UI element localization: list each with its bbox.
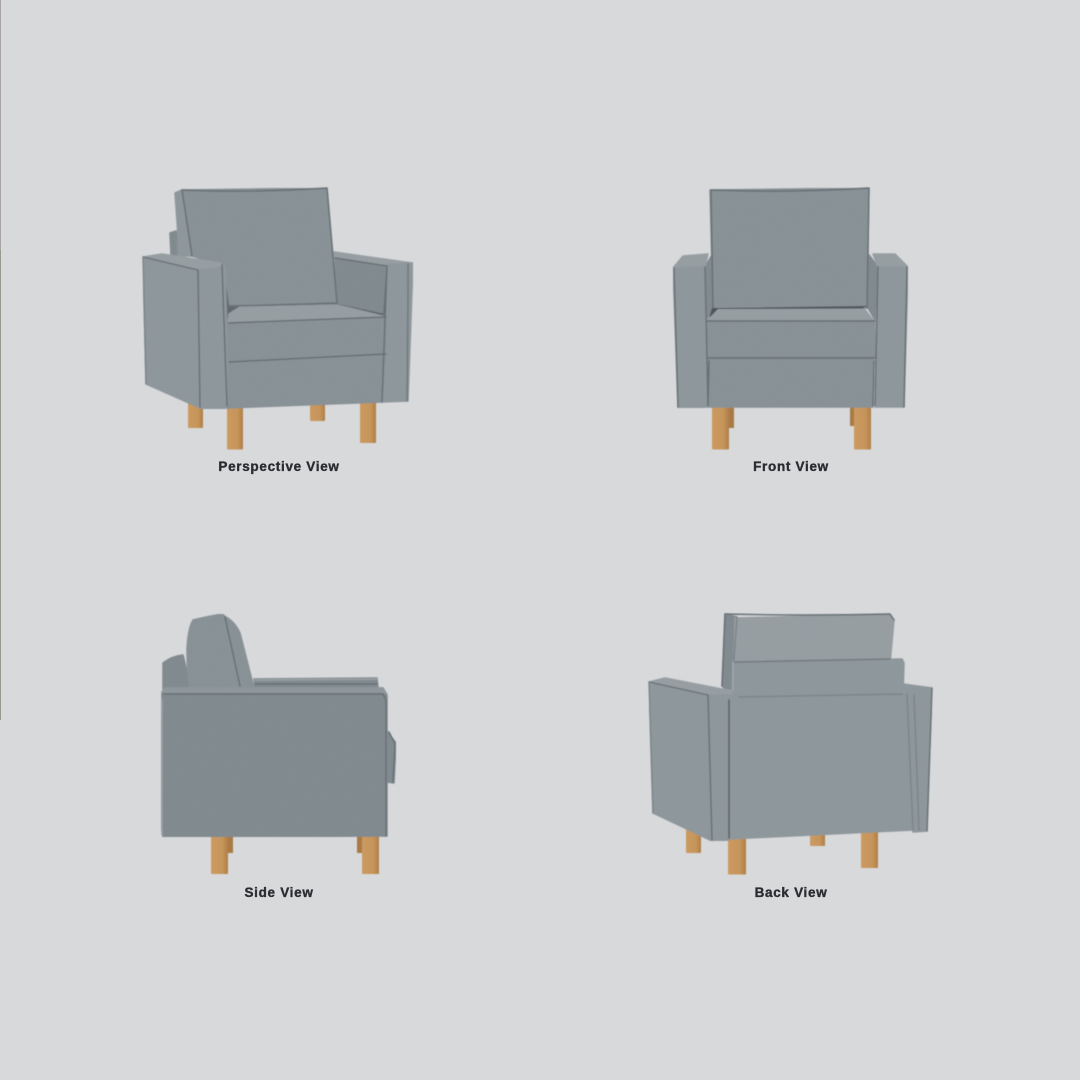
left arm top bbox=[649, 678, 737, 697]
label: side view: Side View bbox=[244, 885, 314, 900]
seat top bbox=[228, 305, 386, 323]
chair: perspective view bbox=[143, 188, 413, 450]
left arm top bbox=[673, 254, 708, 268]
seat top bbox=[707, 307, 873, 320]
arm side panel bbox=[161, 688, 387, 837]
upholstery: back view bbox=[649, 614, 932, 841]
upholstery: front view bbox=[673, 188, 908, 408]
left inner arm bbox=[705, 255, 713, 320]
upholstery: side view bbox=[161, 614, 396, 837]
upper back panel bbox=[732, 659, 904, 697]
rear arm stub bbox=[163, 655, 191, 689]
right arm top bbox=[334, 252, 412, 266]
label: back view: Back View bbox=[755, 885, 827, 900]
right inner arm bbox=[868, 255, 878, 320]
upholstery: perspective view bbox=[143, 188, 413, 409]
seat front bbox=[228, 317, 386, 359]
label: perspective view: Perspective View bbox=[218, 459, 340, 474]
back cushion bbox=[182, 188, 337, 306]
seat front bbox=[707, 321, 875, 357]
lower back panel bbox=[729, 694, 913, 839]
left arm top bbox=[143, 254, 225, 270]
seams: back view bbox=[649, 614, 932, 840]
chair: front view bbox=[673, 188, 908, 450]
legs: side view bbox=[211, 834, 379, 874]
legs: front view bbox=[712, 404, 871, 450]
right arm front bbox=[382, 263, 413, 402]
base front bbox=[708, 357, 874, 407]
left arm front bbox=[198, 267, 229, 409]
left arm side bbox=[649, 682, 712, 841]
arm top band bbox=[162, 688, 386, 694]
seams: perspective view bbox=[143, 188, 408, 407]
shadow backing bbox=[225, 280, 385, 358]
base front bbox=[228, 354, 385, 408]
left arm front bbox=[673, 267, 708, 408]
seams: front view bbox=[674, 188, 907, 407]
right arm top bbox=[873, 254, 908, 267]
label: front view: Front View bbox=[753, 459, 829, 474]
legs: back view bbox=[686, 825, 878, 874]
left edge strip bbox=[0, 0, 1, 720]
cushion rear bbox=[734, 614, 894, 664]
left arm side bbox=[143, 257, 200, 408]
left arm rear bbox=[708, 695, 737, 841]
back cushion bbox=[187, 614, 254, 688]
right inner arm bbox=[335, 258, 387, 313]
chair: side view bbox=[161, 614, 396, 874]
back cushion bbox=[710, 188, 869, 308]
seat cushion edge bbox=[386, 730, 396, 783]
cushion side bbox=[722, 614, 737, 690]
right arm bbox=[903, 684, 932, 832]
chair: back view bbox=[649, 614, 932, 874]
seams: side view bbox=[162, 617, 395, 836]
far arm top bbox=[254, 678, 378, 688]
right arm front bbox=[875, 267, 908, 407]
rear arm stub bbox=[170, 231, 182, 255]
legs: perspective view bbox=[188, 398, 376, 450]
back cushion side bbox=[175, 190, 192, 256]
